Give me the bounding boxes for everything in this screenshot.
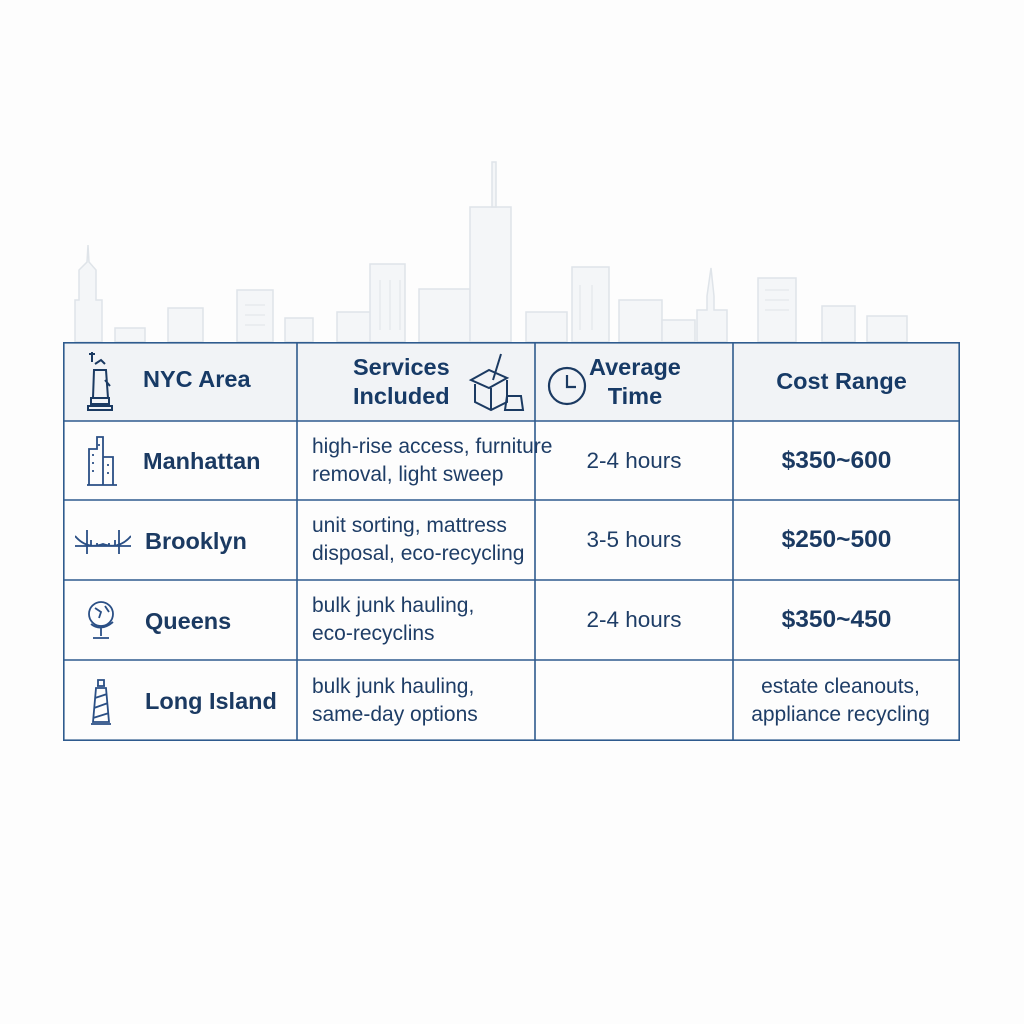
background skyline xyxy=(74,161,908,342)
row: Brooklyn: unit sorting, mattress xyxy=(312,514,507,537)
table xyxy=(63,342,960,741)
header: NYC Area xyxy=(87,352,251,411)
row: Long Island: same-day options xyxy=(312,702,478,726)
icon: globe xyxy=(88,601,114,639)
header: Services Included: Services xyxy=(353,354,450,380)
row: Queens xyxy=(88,594,891,645)
row: Long Island: Long Island xyxy=(145,688,277,714)
icon: box and broom xyxy=(468,354,524,412)
row: Queens: $350~450 xyxy=(782,606,891,633)
row: Manhattan: $350~600 xyxy=(782,446,891,474)
header: Average Time xyxy=(548,354,681,409)
icon: clock xyxy=(548,366,586,406)
row: Brooklyn xyxy=(75,514,891,565)
row: Queens: Queens xyxy=(145,608,231,634)
header: Cost Range: Cost Range xyxy=(776,368,907,394)
row: Queens: bulk junk hauling, xyxy=(312,594,474,617)
row: Brooklyn: 3-5 hours xyxy=(586,527,682,552)
header: Average Time: Average xyxy=(589,354,681,380)
row: Manhattan: Manhattan xyxy=(143,448,260,474)
row: Manhattan: 2-4 hours xyxy=(586,448,682,472)
row: Brooklyn: disposal, eco-recycling xyxy=(312,542,524,565)
icon: skyscrapers xyxy=(87,436,117,486)
row: Long Island: bulk junk hauling, xyxy=(312,674,474,698)
header: NYC Area: NYC Area xyxy=(143,366,251,392)
icon: lighthouse xyxy=(91,679,111,725)
row: Queens: eco-recyclins xyxy=(312,622,435,645)
row: Queens: 2-4 hours xyxy=(586,607,682,632)
row: Brooklyn: Brooklyn xyxy=(145,528,247,554)
row: Long Island xyxy=(91,674,930,726)
row: Manhattan xyxy=(87,434,891,486)
row: Brooklyn: $250~500 xyxy=(782,526,891,553)
icon: statue of liberty xyxy=(87,352,113,411)
icon: bridge xyxy=(75,530,131,554)
row: Long Island: estate cleanouts, xyxy=(761,674,920,698)
header: Services Included xyxy=(353,354,524,412)
header: Services Included: Included xyxy=(353,383,450,409)
header: Average Time: Time xyxy=(608,383,662,409)
row: Manhattan: high-rise access, furniture xyxy=(312,434,552,458)
row: Manhattan: removal, light sweep xyxy=(312,462,503,486)
row: Long Island: appliance recycling xyxy=(751,702,930,726)
